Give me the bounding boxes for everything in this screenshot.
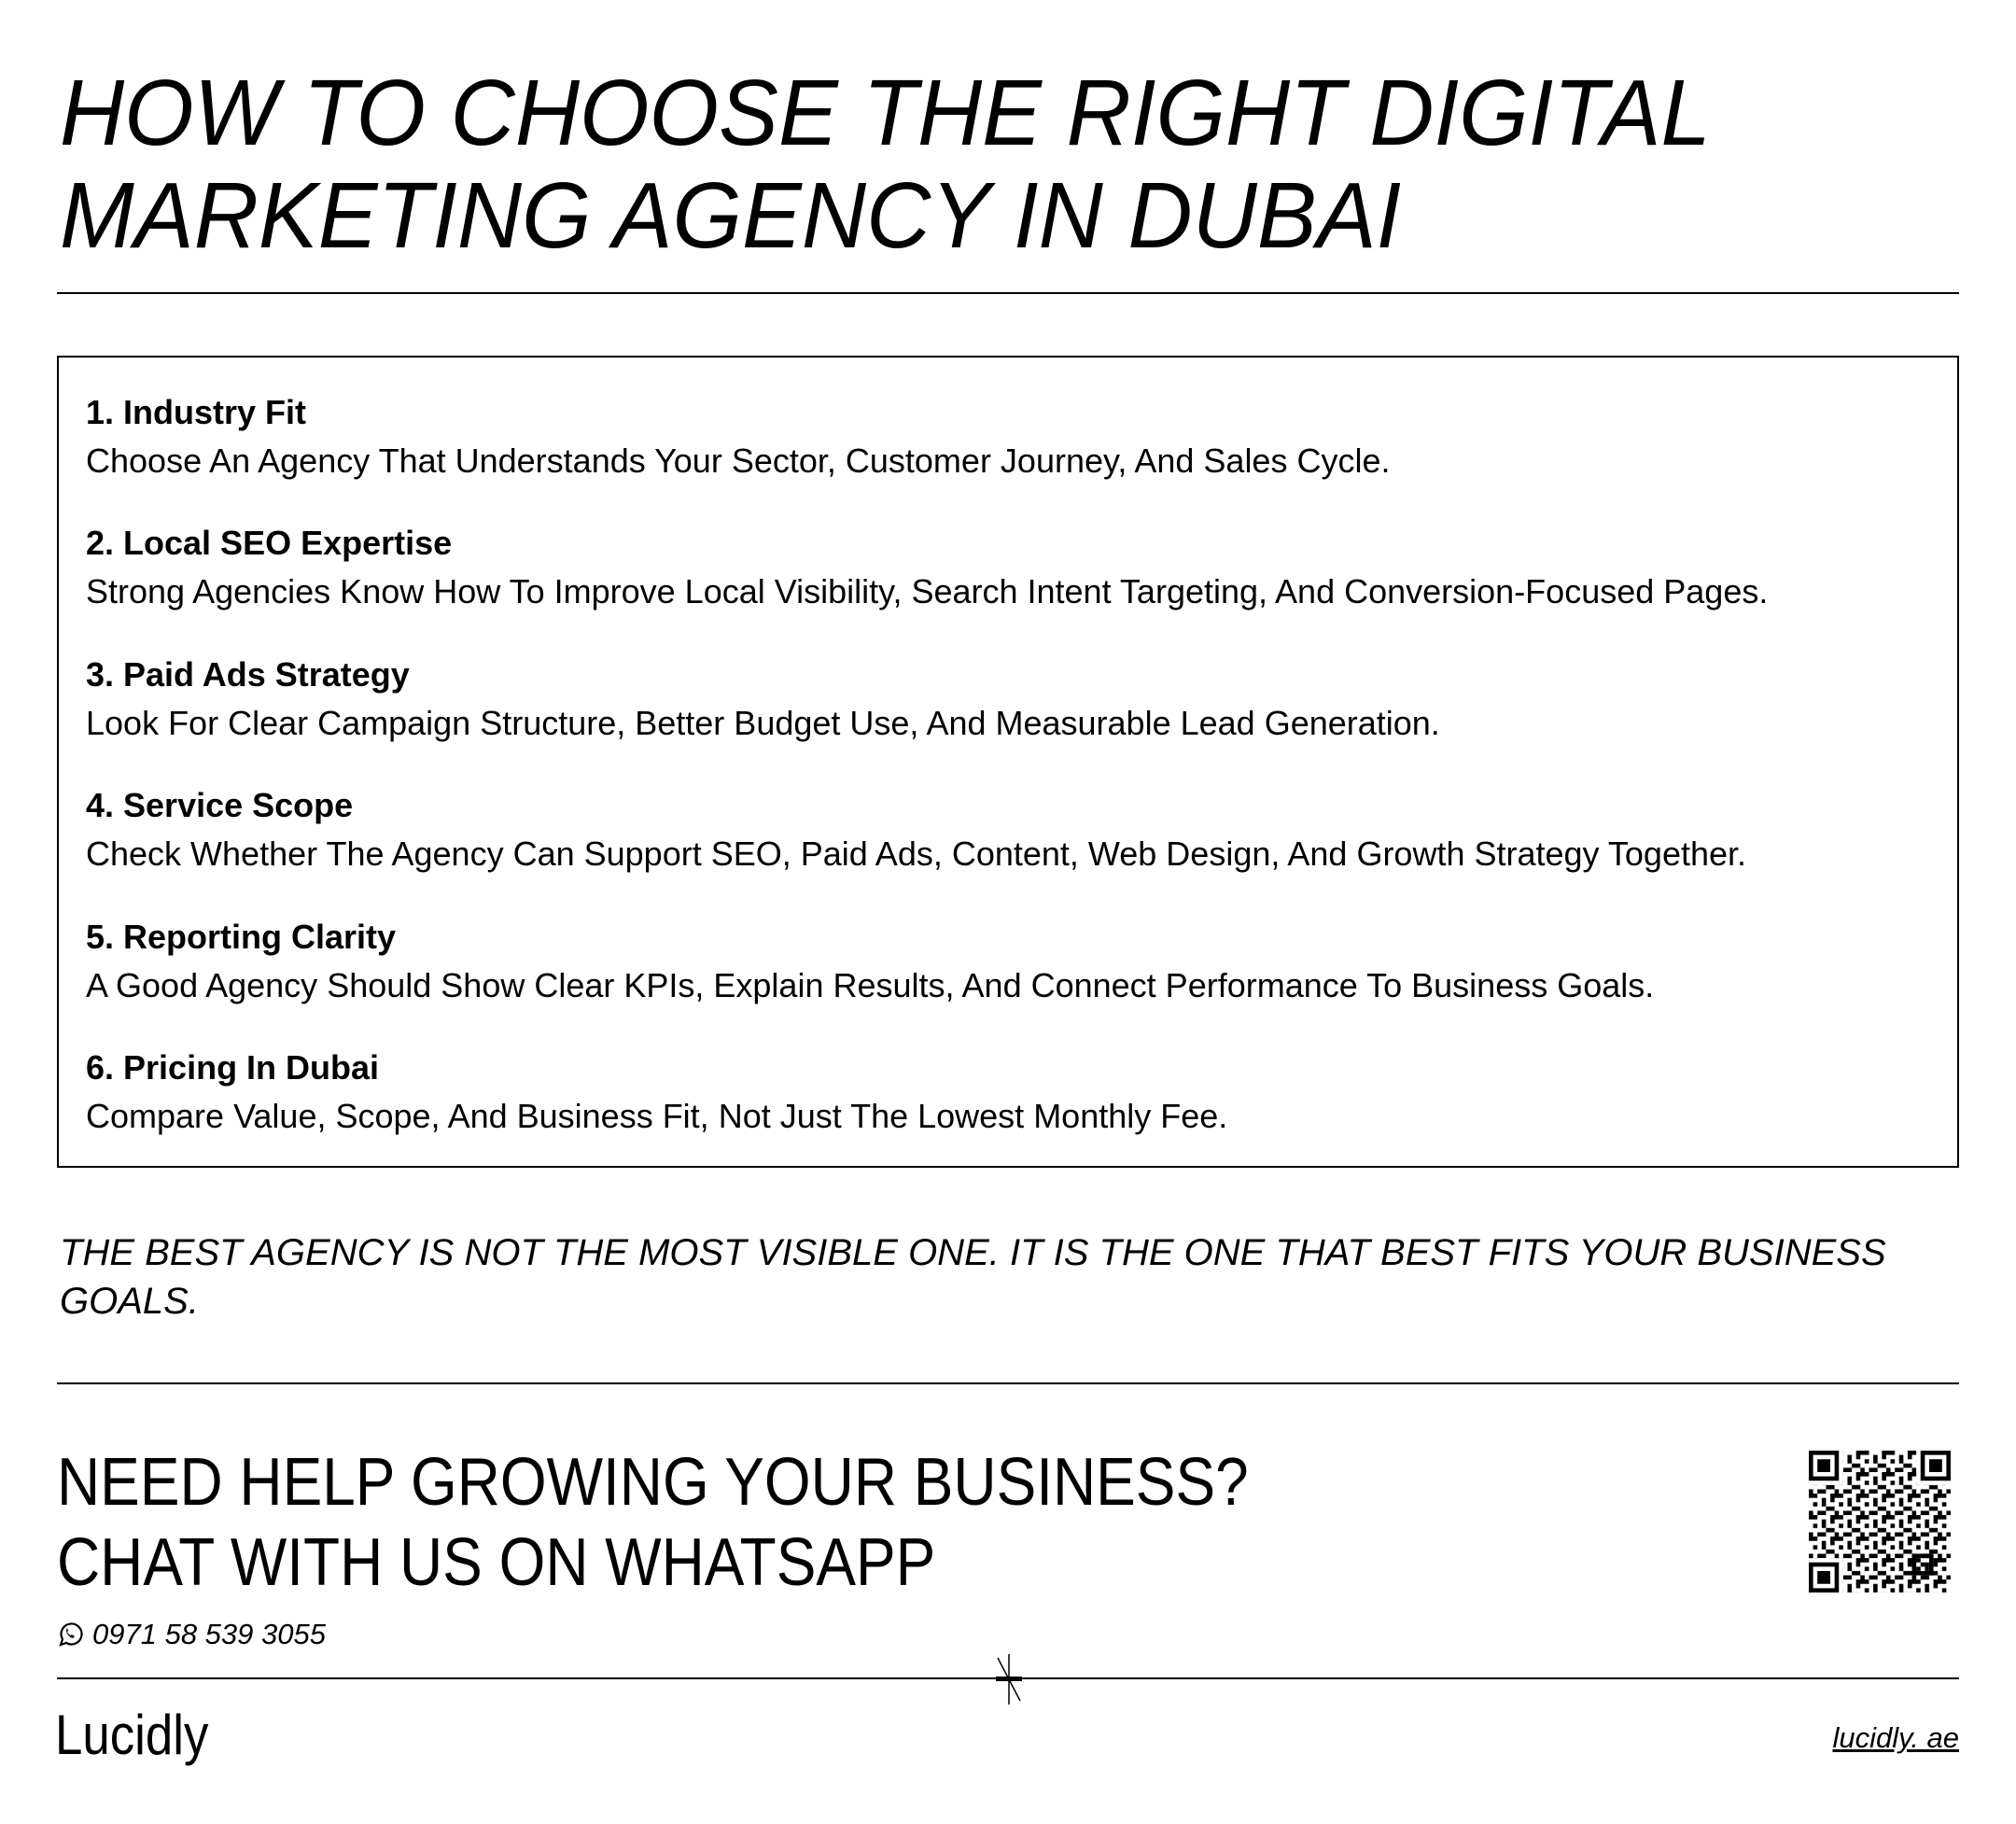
quote: THE BEST AGENCY IS NOT THE MOST VISIBLE ONE. IT IS THE ONE THAT BEST FITS YOUR BUSINESS bbox=[60, 1232, 1886, 1273]
item 2: Strong Agencies Know How To Improve Local Visibility, Search Intent Targeting, And Conversion-Focused Pages. bbox=[86, 572, 1768, 610]
title bbox=[60, 61, 1711, 268]
quote bbox=[60, 1232, 1886, 1322]
item 1: 1. Industry Fit bbox=[86, 393, 306, 431]
item 6: Compare Value, Scope, And Business Fit, Not Just The Lowest Monthly Fee. bbox=[86, 1097, 1227, 1135]
title: MARKETING AGENCY IN DUBAI bbox=[60, 163, 1401, 268]
item 5 bbox=[86, 918, 1654, 1004]
title: HOW TO CHOOSE THE RIGHT DIGITAL bbox=[60, 61, 1711, 165]
item 3 bbox=[86, 655, 1440, 742]
icon: star mark bbox=[996, 1654, 1022, 1705]
item 3: Look For Clear Campaign Structure, Better Budget Use, And Measurable Lead Generation. bbox=[86, 704, 1440, 742]
item 6: 6. Pricing In Dubai bbox=[86, 1048, 379, 1087]
item 4: 4. Service Scope bbox=[86, 786, 353, 824]
CTA heading bbox=[57, 1445, 1249, 1600]
item 4 bbox=[86, 786, 1746, 873]
item 6 bbox=[86, 1048, 1227, 1135]
item 5: 5. Reporting Clarity bbox=[86, 918, 396, 956]
item 1 bbox=[86, 393, 1390, 480]
phone contact: 0971 58 539 3055 bbox=[92, 1618, 326, 1650]
item 2 bbox=[86, 524, 1768, 610]
icon: whatsapp bbox=[59, 1622, 83, 1647]
item 5: A Good Agency Should Show Clear KPIs, Explain Results, And Connect Performance To Business Goals. bbox=[86, 966, 1654, 1004]
quote: GOALS. bbox=[60, 1281, 199, 1322]
CTA heading: CHAT WITH US ON WHATSAPP bbox=[57, 1525, 935, 1600]
QR code bbox=[1809, 1451, 1951, 1592]
website link: lucidly. ae bbox=[1832, 1721, 1959, 1754]
item 4: Check Whether The Agency Can Support SEO, Paid Ads, Content, Web Design, And Growth Strategy Together. bbox=[86, 835, 1746, 873]
item 1: Choose An Agency That Understands Your Sector, Customer Journey, And Sales Cycle. bbox=[86, 442, 1390, 480]
panel: checklist bbox=[57, 356, 1959, 1168]
CTA heading: NEED HELP GROWING YOUR BUSINESS? bbox=[57, 1445, 1249, 1520]
item 3: 3. Paid Ads Strategy bbox=[86, 655, 410, 694]
item 2: 2. Local SEO Expertise bbox=[86, 524, 452, 562]
logo: Lucidly: Lucidly bbox=[55, 1704, 208, 1766]
